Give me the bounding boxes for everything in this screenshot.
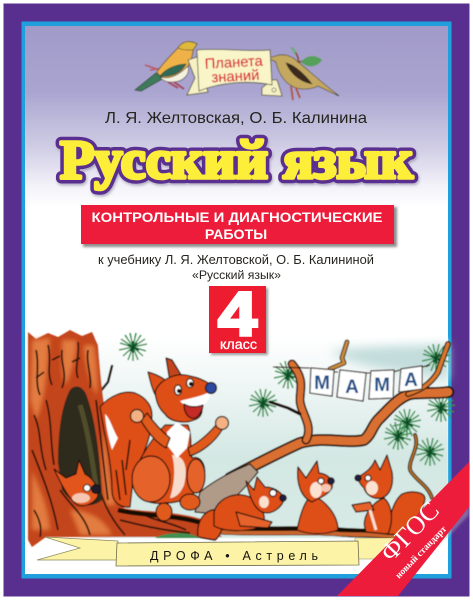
branches — [100, 342, 448, 498]
grade badge: 4 — [218, 280, 258, 349]
logo ribbon — [187, 49, 282, 96]
logo text — [204, 54, 265, 87]
thick branch base — [195, 464, 258, 514]
squirrel A — [198, 477, 286, 540]
publisher logo: Planeta Znaniy — [135, 42, 339, 100]
red banner: work type: КОНТРОЛЬНЫЕ И ДИАГНОСТИЧЕСКИЕ — [92, 210, 382, 226]
nose — [206, 382, 216, 394]
bottom publisher ribbon: ДРОФА • Астрель — [150, 549, 318, 563]
bottom publisher ribbon — [37, 537, 405, 566]
pine needles back — [119, 333, 455, 466]
red banner: work type: РАБОТЫ — [205, 227, 267, 243]
lower branch — [205, 529, 398, 537]
big squirrel — [100, 358, 228, 521]
hands — [130, 410, 144, 422]
torso — [133, 425, 205, 503]
tree hollow — [58, 387, 102, 505]
MAMA flags: А — [345, 377, 359, 398]
subtitle — [98, 253, 374, 282]
MAMA flags: А — [404, 370, 418, 391]
ears — [148, 372, 170, 398]
logo text: знаний — [211, 68, 260, 86]
MAMA flags: М — [314, 373, 330, 394]
mouth — [184, 404, 203, 418]
squirrel B — [297, 461, 338, 534]
MAMA flags — [273, 365, 430, 401]
right bird — [268, 47, 339, 100]
title: Русский — [60, 129, 268, 190]
belly — [170, 455, 186, 498]
FGOS corner ribbon: новый стандарт — [393, 524, 449, 581]
chest — [167, 422, 190, 458]
left thigh — [132, 456, 170, 502]
squirrel C — [352, 455, 425, 535]
muzzle — [180, 390, 212, 408]
illustration: forest scene — [28, 330, 455, 547]
head — [155, 375, 213, 422]
title: язык — [283, 129, 413, 190]
distant haze — [330, 344, 448, 380]
tail — [100, 392, 152, 507]
title — [60, 129, 414, 192]
title: язык — [283, 129, 413, 190]
red banner: work type — [81, 205, 397, 247]
left bird — [135, 42, 197, 91]
lower foliage — [155, 533, 200, 538]
tree trunk — [28, 330, 222, 547]
title: язык — [284, 131, 414, 192]
subtitle: к учебнику Л. Я. Желтовской, О. Б. Калининой — [98, 253, 374, 267]
eyes — [174, 385, 182, 395]
subtitle: «Русский язык» — [192, 268, 281, 282]
peeking squirrel in hollow — [54, 460, 100, 506]
grade badge: класс — [220, 337, 257, 352]
MAMA flags: М — [374, 375, 390, 396]
authors: Л. Я. Желтовская, О. Б. Калинина — [105, 110, 367, 127]
tail white stripe — [105, 414, 118, 450]
title: Русский — [61, 131, 269, 192]
grade badge — [209, 280, 268, 355]
arms — [141, 413, 170, 448]
tail fur ink — [116, 440, 130, 500]
scene air background — [90, 338, 448, 538]
FGOS corner ribbon: ФГОС — [374, 496, 445, 567]
title: Русский — [60, 129, 268, 190]
logo text: Планета — [204, 54, 264, 73]
feet — [156, 503, 172, 521]
right thigh — [187, 459, 205, 493]
FGOS corner ribbon — [337, 462, 469, 596]
